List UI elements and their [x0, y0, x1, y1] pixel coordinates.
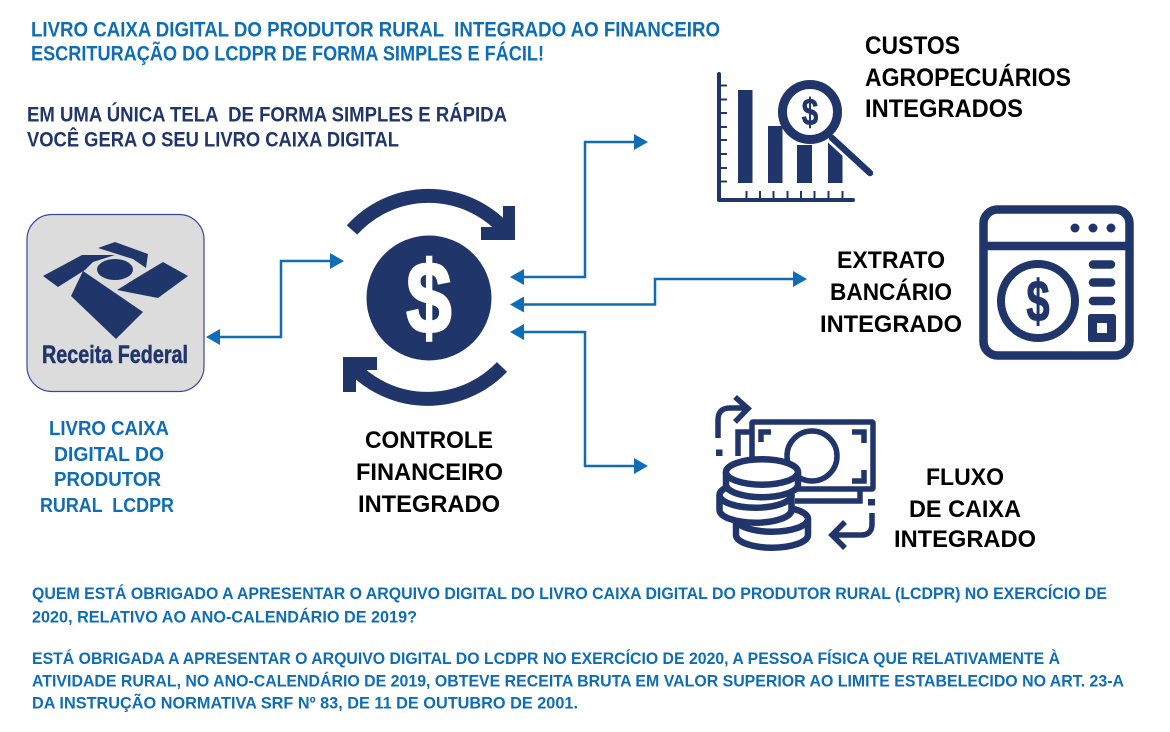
text: question: QUEM ESTÁ OBRIGADO A APRESENTAR O ARQUIVO DIGITAL DO LIVRO CAIXA DIGITAL DO PRODUTOR RURAL (LCDPR) NO EXERCÍCIO DE: [32, 584, 1107, 603]
text: Livro Caixa Digital label: [40, 418, 174, 517]
text: answer: DA INSTRUÇÃO NORMATIVA SRF Nº 83, DE 11 DE OUTUBRO DE 2001.: [32, 692, 578, 712]
text: Fluxo de Caixa Integrado: INTEGRADO: [894, 526, 1036, 553]
panel: Receita Federal logo: Receita Federal: [42, 341, 188, 369]
title: LIVRO CAIXA DIGITAL DO PRODUTOR RURAL INTEGRADO AO FINANCEIRO: [31, 18, 720, 42]
text: Extrato Bancario Integrado: EXTRATO: [837, 247, 945, 274]
icon: browser window with dollar: $: [1026, 268, 1050, 334]
text: Extrato Bancario Integrado: [820, 247, 962, 338]
text: question: 2020, RELATIVO AO ANO-CALENDÁRIO DE 2019?: [32, 608, 417, 626]
subtitle: [27, 102, 507, 152]
icon: central dollar cycle: $: [406, 240, 452, 355]
text: Livro Caixa Digital label: DIGITAL DO: [54, 444, 164, 466]
subtitle: EM UMA ÚNICA TELA DE FORMA SIMPLES E RÁPIDA: [27, 102, 507, 126]
text: Fluxo de Caixa Integrado: FLUXO: [926, 464, 1004, 491]
text: Controle Financeiro Integrado: INTEGRADO: [358, 491, 500, 518]
panel: Receita Federal logo: [27, 214, 204, 392]
text: Controle Financeiro Integrado: CONTROLE: [365, 427, 493, 454]
arrow: centre to costs: [510, 134, 648, 285]
arrow: centre to cash flow: [510, 324, 648, 474]
text: Fluxo de Caixa Integrado: [894, 464, 1036, 553]
text: Fluxo de Caixa Integrado: DE CAIXA: [909, 496, 1021, 523]
icon: bar chart with magnifier: [719, 74, 870, 200]
text: question: [32, 584, 1107, 626]
text: Livro Caixa Digital label: LIVRO CAIXA: [49, 418, 169, 440]
text: Controle Financeiro Integrado: [356, 427, 503, 518]
icon: bar chart with magnifier: $: [802, 92, 818, 134]
subtitle: VOCÊ GERA O SEU LIVRO CAIXA DIGITAL: [27, 128, 399, 152]
icon: money and coins: [716, 397, 875, 548]
text: answer: [32, 649, 1124, 712]
text: Custos Agropecuarios Integrados: INTEGRADOS: [865, 95, 1023, 123]
text: Custos Agropecuarios Integrados: [865, 32, 1071, 123]
icon: browser window with dollar: [984, 210, 1130, 356]
title: ESCRITURAÇÃO DO LCDPR DE FORMA SIMPLES E FÁCIL!: [31, 42, 544, 66]
icon: central dollar cycle: [343, 196, 515, 399]
text: Controle Financeiro Integrado: FINANCEIRO: [356, 459, 503, 486]
arrow: centre to bank statement: [510, 271, 807, 312]
text: Custos Agropecuarios Integrados: AGROPECUÁRIOS: [865, 63, 1071, 92]
text: Livro Caixa Digital label: RURAL LCDPR: [40, 495, 174, 517]
text: Livro Caixa Digital label: PRODUTOR: [54, 469, 162, 491]
text: answer: ESTÁ OBRIGADA A APRESENTAR O ARQUIVO DIGITAL DO LCDPR NO EXERCÍCIO DE 2020, A PESSOA FÍSICA QUE RELATIVAMENTE À: [32, 649, 1060, 668]
text: Custos Agropecuarios Integrados: CUSTOS: [865, 32, 960, 60]
text: answer: ATIVIDADE RURAL, NO ANO-CALENDÁRIO DE 2019, OBTEVE RECEITA BRUTA EM VALOR SUPERIOR AO LIMITE ESTABELECIDO NO ART. 23-A: [32, 672, 1124, 690]
text: Extrato Bancario Integrado: INTEGRADO: [820, 311, 962, 338]
text: Extrato Bancario Integrado: BANCÁRIO: [830, 278, 952, 306]
title: [31, 18, 720, 66]
arrow: logo to centre: [206, 253, 344, 345]
